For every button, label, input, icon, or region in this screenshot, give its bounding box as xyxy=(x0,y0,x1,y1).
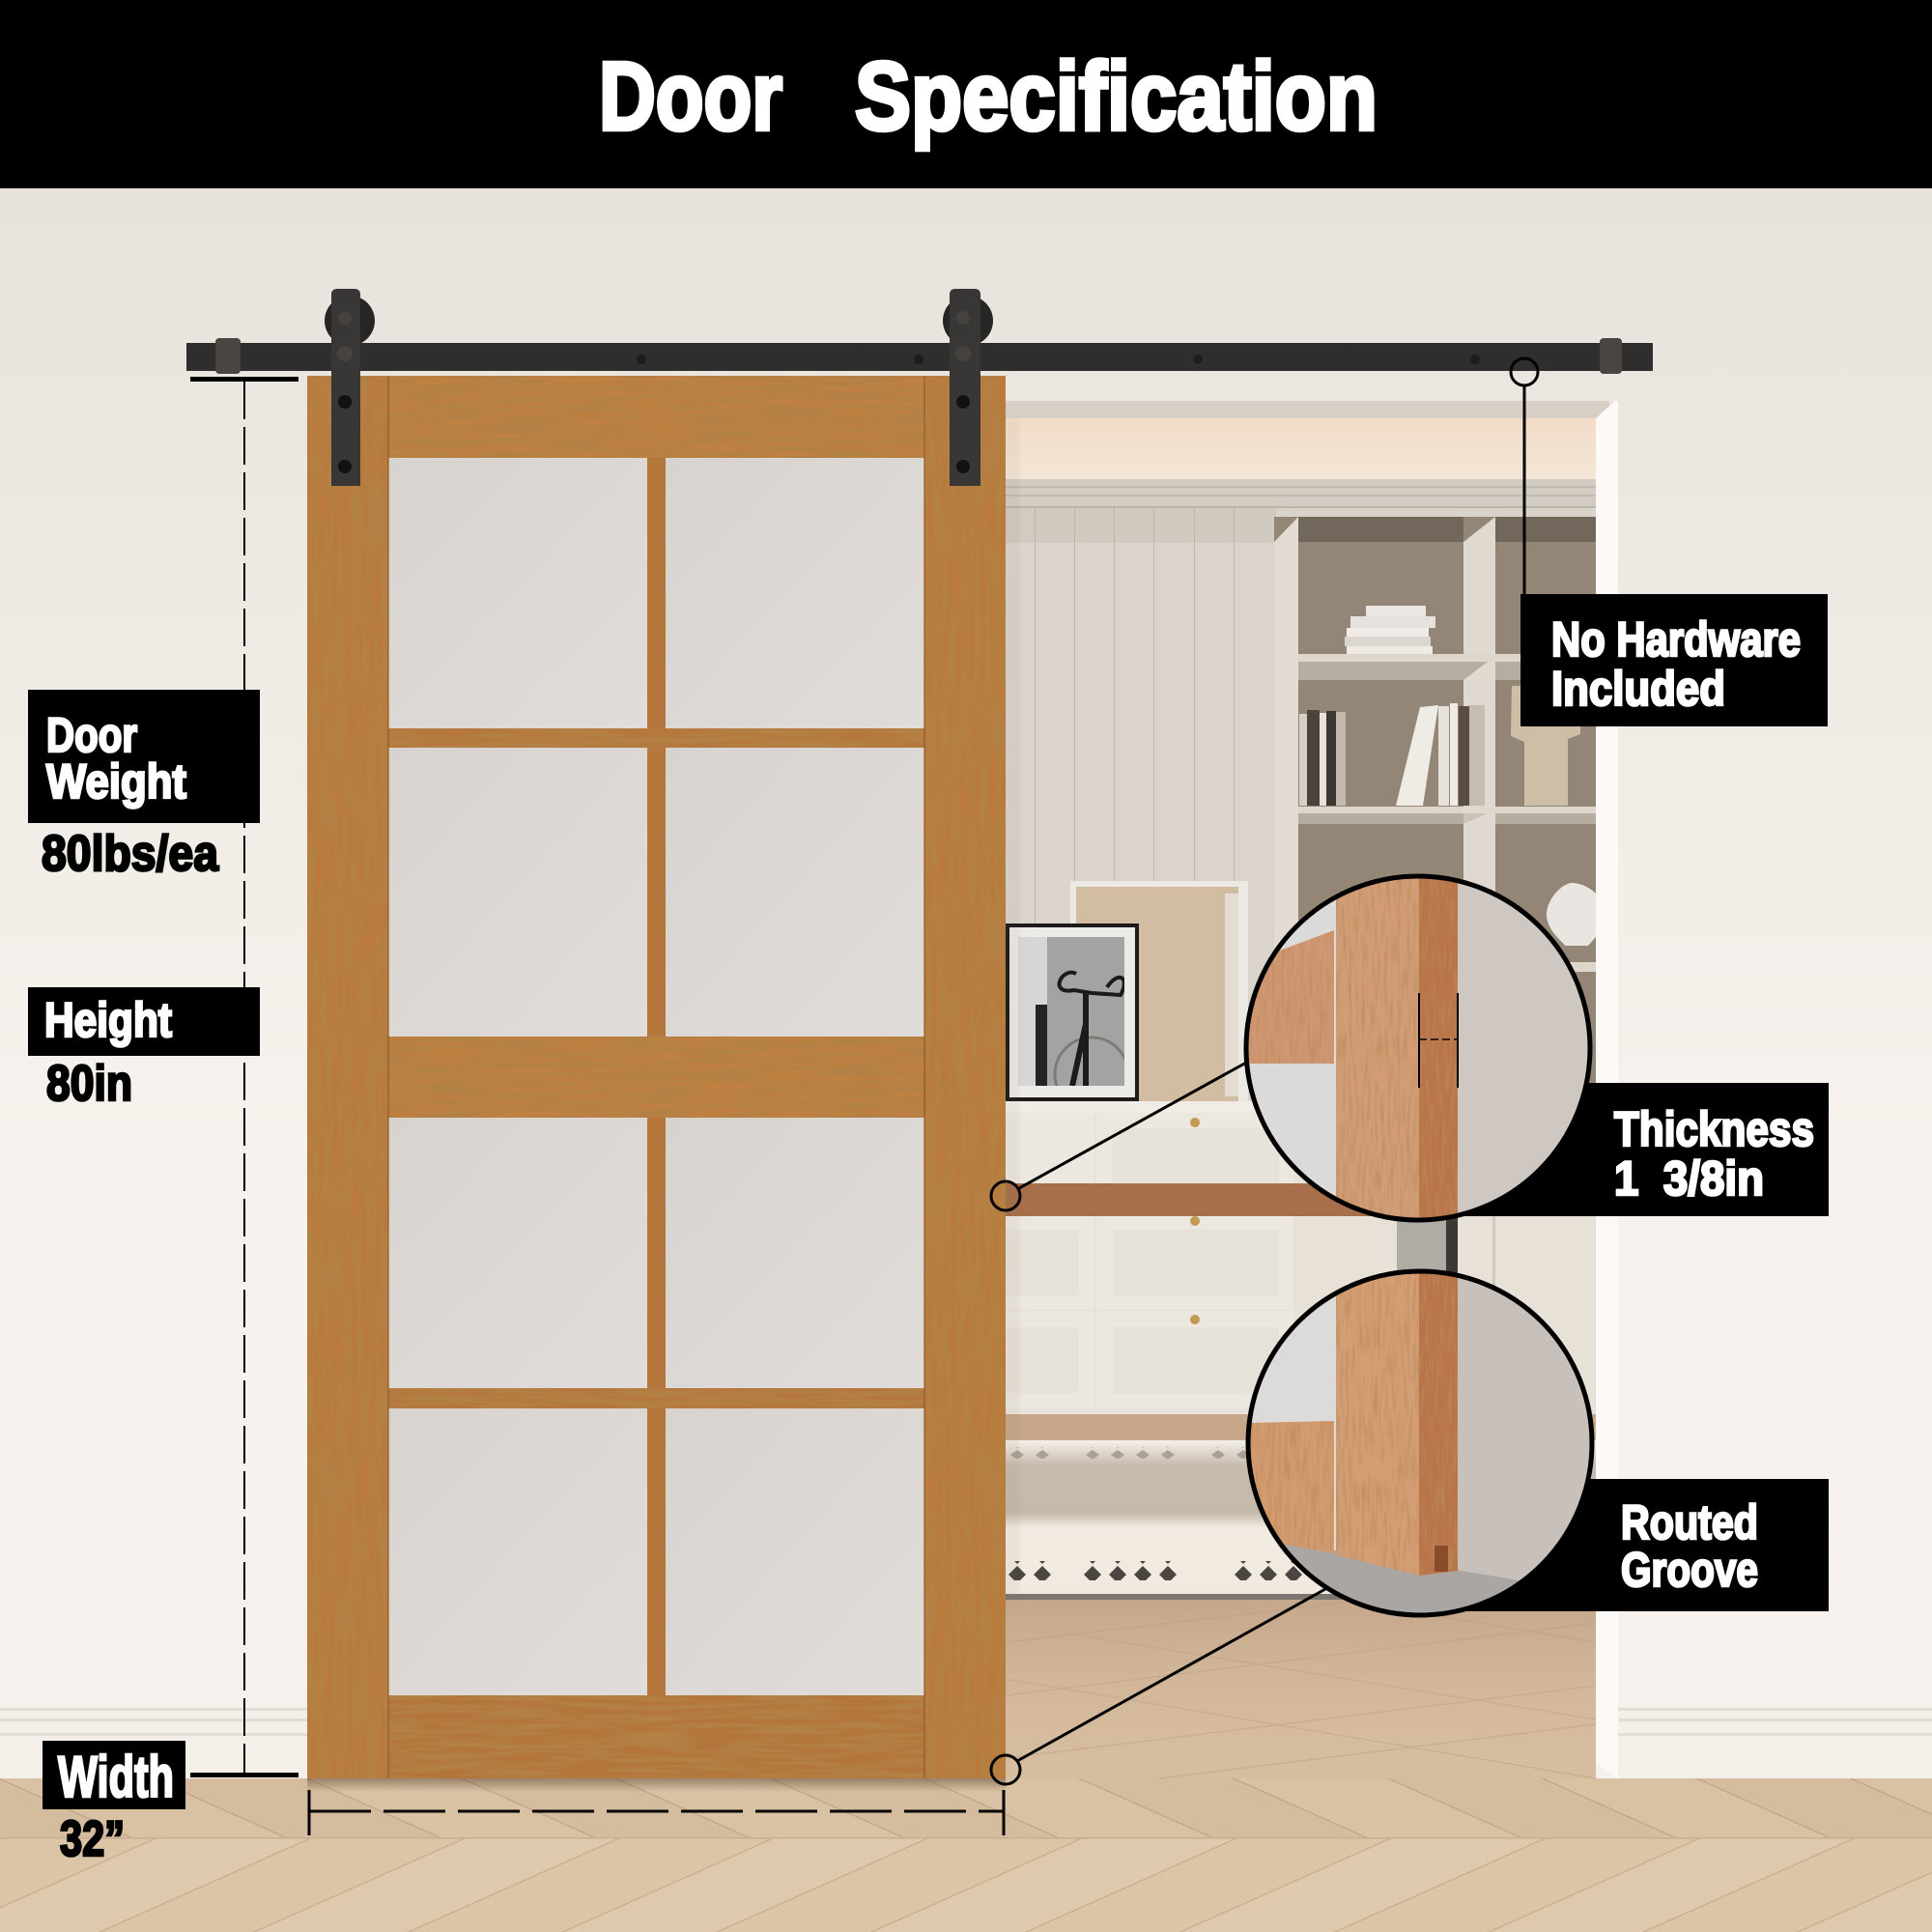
header bar xyxy=(0,0,1932,188)
callout: no hardware included: No Hardware xyxy=(1551,612,1801,667)
right hanger xyxy=(943,289,993,486)
vertical muntin xyxy=(647,458,666,1695)
bookcase xyxy=(1274,517,1596,1140)
left stile xyxy=(307,376,388,1778)
callout: door weight: Weight xyxy=(46,754,186,809)
callout: door weight xyxy=(28,690,260,823)
title: Door xyxy=(599,43,782,151)
title: Specification xyxy=(855,43,1378,151)
crown moulding xyxy=(1006,479,1596,508)
thickness dimension marks xyxy=(1419,993,1458,1088)
wooden desk shelf xyxy=(1006,1183,1372,1216)
height value: 80in xyxy=(46,1056,132,1112)
door shadow xyxy=(1006,418,1019,1602)
panelled wall xyxy=(1006,508,1276,923)
floor xyxy=(0,1778,1932,1932)
stile edge with groove xyxy=(1419,1265,1458,1576)
rail end stop right xyxy=(1600,338,1622,374)
callout: thickness: Thickness xyxy=(1614,1102,1814,1156)
callout: door weight: Door xyxy=(46,708,137,762)
rug xyxy=(1005,1440,1596,1600)
room floor xyxy=(1006,1600,1596,1778)
callout: no hardware included: Included xyxy=(1551,662,1725,716)
stacked books xyxy=(1345,606,1435,654)
stile edge xyxy=(1419,869,1458,1227)
right stile xyxy=(924,376,1006,1778)
rail end xyxy=(1246,930,1334,1064)
weight value: 80lbs/ea xyxy=(42,826,219,882)
bottom rail xyxy=(388,1695,924,1778)
detail circle: routed groove xyxy=(1241,1265,1604,1623)
top rail xyxy=(388,376,924,458)
height dimension line xyxy=(190,377,298,1777)
white vase xyxy=(1547,883,1596,946)
sculptural lamp xyxy=(1511,686,1580,806)
callout: width: Width xyxy=(58,1745,174,1809)
stile face xyxy=(1336,1265,1419,1576)
detail circle: door thickness xyxy=(1241,869,1604,1227)
barn door track rail xyxy=(186,338,1653,374)
callout: no hardware included xyxy=(1520,594,1828,726)
ceiling glow xyxy=(1006,418,1596,480)
width dimension line xyxy=(307,1790,1005,1835)
grey floor xyxy=(1284,1544,1520,1613)
callout: height xyxy=(28,987,260,1056)
stile face xyxy=(1336,869,1419,1227)
horizontal muntins xyxy=(388,728,924,1408)
title xyxy=(599,43,1378,151)
framed beige art xyxy=(1070,881,1248,1101)
left hanger xyxy=(325,289,375,486)
door opening frame xyxy=(1006,401,1618,1778)
callout: no hardware leader xyxy=(1511,358,1538,594)
callout: thickness xyxy=(1449,1083,1829,1216)
baseboards xyxy=(0,1708,1932,1778)
framed bicycle photo xyxy=(1006,923,1139,1111)
upright books xyxy=(1299,703,1485,806)
room seen through opening xyxy=(1005,418,1596,1602)
leader: groove detail xyxy=(991,1589,1325,1784)
rail end stop left xyxy=(215,338,241,374)
callout: routed groove: Routed xyxy=(1621,1495,1758,1549)
door xyxy=(307,376,1019,1778)
glass panes xyxy=(388,458,924,1695)
leader: thickness detail xyxy=(991,1063,1246,1210)
middle rail xyxy=(388,1037,924,1118)
rail end xyxy=(1249,1421,1334,1553)
callout: thickness: 1 3/8in xyxy=(1614,1151,1764,1206)
callout: height: Height xyxy=(44,993,172,1047)
callout: routed groove xyxy=(1449,1479,1829,1611)
cabinets xyxy=(1006,1101,1596,1414)
callout: routed groove: Groove xyxy=(1621,1543,1758,1597)
width value: 32” xyxy=(60,1811,125,1867)
room floor behind rug xyxy=(1006,1414,1596,1440)
callout: width xyxy=(43,1741,185,1809)
